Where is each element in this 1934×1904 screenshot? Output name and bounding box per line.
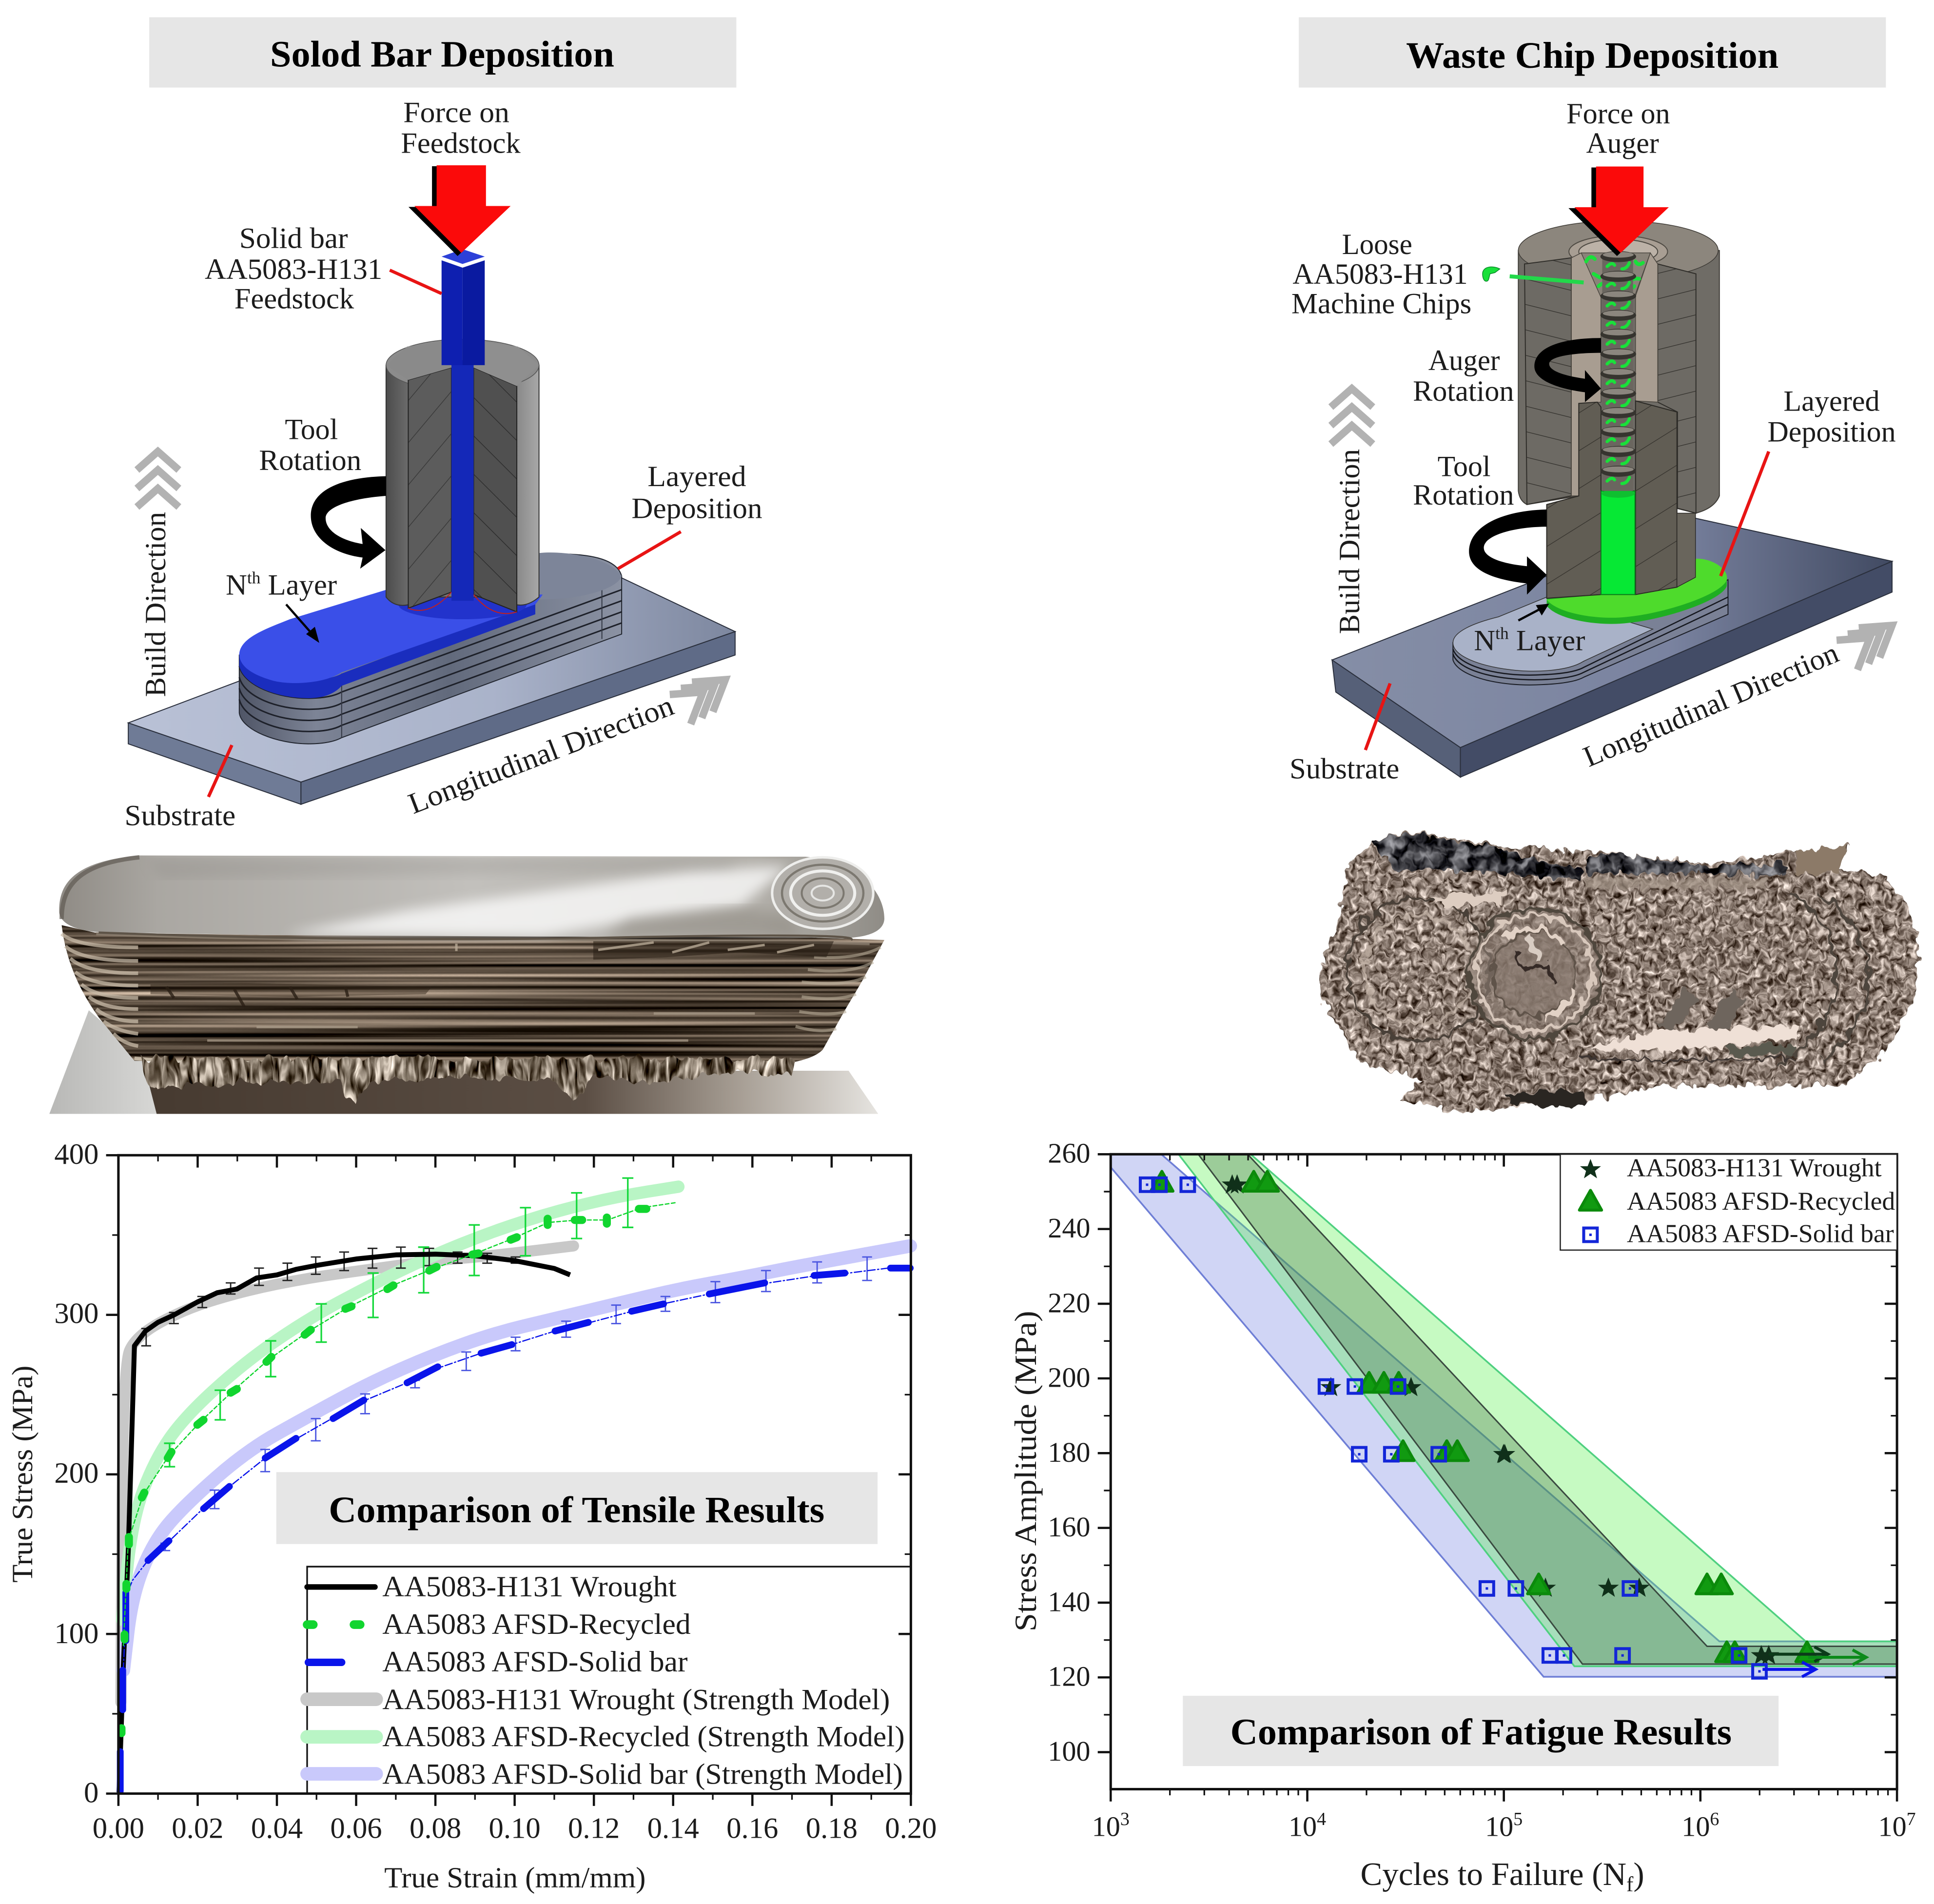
axes and ticks: [1098, 1154, 1897, 1802]
icon: red force arrow: [410, 165, 510, 255]
y axis tick labels: 160: [1048, 1511, 1090, 1543]
x axis tick labels: 7: [1907, 1809, 1916, 1829]
lower tool: [1547, 401, 1696, 598]
error bars recycled: [164, 1178, 633, 1467]
x axis tick labels: 0.08: [410, 1812, 461, 1845]
label: build direction: Build Direction: [139, 512, 172, 697]
label: loose machine chips: Machine Chips: [1291, 288, 1471, 320]
label: loose machine chips: Loose: [1342, 228, 1412, 261]
label: layered deposition: Layered: [647, 460, 746, 493]
label: substrate: [1289, 684, 1399, 785]
green deposited chips column: [1601, 489, 1635, 594]
Nth layer blue top: [239, 587, 543, 698]
heading: Comparison of Tensile Results: Comparison of Tensile Results: [329, 1490, 824, 1531]
x axis tick labels: 10: [1092, 1811, 1120, 1843]
label: layered deposition: Deposition: [631, 492, 762, 525]
panel: waste chip deposition schematic: [1289, 17, 1896, 785]
x axis tick labels: [1092, 1809, 1916, 1843]
x axis tick labels: 0.00: [93, 1812, 144, 1845]
x axis tick labels: 0.14: [647, 1812, 699, 1845]
y axis tick labels: 260: [1048, 1138, 1090, 1169]
label: auger rotation: Auger: [1428, 344, 1500, 377]
label: Nth layer: [1474, 605, 1585, 657]
arrows: run-out specimens: [1762, 1647, 1866, 1677]
panel: solid bar deposition schematic: [125, 17, 762, 832]
x axis tick labels: 10: [1878, 1811, 1907, 1843]
x axis tick labels: 0.12: [568, 1812, 620, 1845]
y axis tick labels: 300: [54, 1297, 98, 1330]
label: force on auger: [1566, 98, 1670, 160]
error bars wrought: [141, 1247, 521, 1346]
label: force on feedstock: [401, 96, 521, 160]
label: tool rotation: [1413, 451, 1514, 511]
label: longitudinal direction: Longitudinal Direction: [1579, 636, 1843, 774]
data: wrought stars: [1222, 1174, 1779, 1664]
label: build direction: [137, 451, 179, 697]
legend: AA5083-H131 Wrought: [1627, 1154, 1882, 1182]
heading: Solod Bar Deposition: Solod Bar Deposition: [270, 34, 614, 75]
label: tool rotation: Rotation: [1413, 479, 1514, 511]
solid bar scatter band: [1111, 1154, 1897, 1677]
axes and ticks: [106, 1155, 911, 1806]
heading: Waste Chip Deposition: [1299, 17, 1886, 88]
label: auger rotation: Rotation: [1413, 375, 1514, 408]
label: Nth layer: th: [1495, 624, 1509, 643]
y axis tick labels: 180: [1048, 1436, 1090, 1468]
curve: AA5083 AFSD-Solid bar: [120, 1268, 910, 1791]
curve: AA5083 AFSD-Recycled: [121, 1203, 675, 1733]
deposited layers stack: [1453, 580, 1728, 685]
label: loose machine chips: AA5083-H131: [1292, 258, 1468, 291]
wrought scatter band: [1198, 1154, 1897, 1664]
label: Nth layer: th: [247, 568, 261, 588]
label: layered deposition: Deposition: [1767, 416, 1896, 449]
x axis tick labels: 0.18: [806, 1812, 858, 1845]
x axis tick labels: 6: [1710, 1809, 1719, 1829]
label: layered deposition: Layered: [1783, 385, 1880, 417]
y axis tick labels: 220: [1048, 1287, 1090, 1318]
x axis title: True Strain (mm/mm): [384, 1862, 645, 1894]
x axis tick labels: 0.06: [330, 1812, 382, 1845]
x axis tick labels: [93, 1812, 937, 1845]
tool cylinder: [386, 339, 539, 619]
label: substrate: Substrate: [125, 800, 235, 832]
substrate plate: [128, 555, 735, 805]
curve: AA5083-H131 Wrought: [119, 1254, 570, 1792]
x axis tick labels: 10: [1681, 1811, 1710, 1843]
arrow: auger rotation: [1534, 338, 1601, 402]
label: longitudinal direction: Longitudinal Direction: [404, 689, 678, 821]
x axis title: f: [1626, 1873, 1634, 1896]
tool marks and highlights: [1347, 891, 1868, 1067]
arrow: tool rotation: [311, 476, 386, 569]
photo: solid bar deposited build: [49, 856, 884, 1114]
data: solid bar squares: [1140, 1178, 1766, 1678]
x axis tick labels: 5: [1513, 1809, 1523, 1829]
strength model bands: [121, 1187, 910, 1702]
x axis tick labels: 0.20: [885, 1812, 937, 1845]
label: layered deposition: [618, 460, 762, 569]
outer auger housing: [1518, 221, 1719, 513]
flash fringe: [136, 1059, 796, 1105]
label: substrate: [125, 745, 235, 832]
label: tool rotation: Tool: [285, 413, 338, 446]
y axis tick labels: 200: [54, 1457, 98, 1490]
y axis tick labels: [54, 1138, 98, 1809]
label: force on auger: Force on: [1566, 98, 1670, 130]
heading: Comparison of Fatigue Results: [1183, 1696, 1778, 1766]
legend: AA5083 AFSD-Recycled: [1627, 1187, 1895, 1216]
legend: [307, 1567, 911, 1794]
arrow: tool rotation: [1469, 510, 1547, 594]
label: force on feedstock: Feedstock: [401, 127, 521, 160]
x axis tick labels: 4: [1317, 1809, 1326, 1829]
legend: AA5083 AFSD-Solid bar: [1627, 1220, 1894, 1248]
label: solid bar feedstock: Solid bar: [239, 222, 348, 255]
label: solid bar feedstock: Feedstock: [234, 282, 354, 315]
label: force on auger: Auger: [1586, 127, 1659, 160]
label: substrate: Substrate: [1289, 752, 1399, 785]
error bars solid bar: [160, 1257, 872, 1551]
chart: fatigue results: [1009, 1138, 1916, 1896]
heading: Waste Chip Deposition: Waste Chip Deposition: [1406, 35, 1778, 76]
label: build direction: Build Direction: [1333, 449, 1366, 634]
x axis tick labels: 10: [1485, 1811, 1513, 1843]
legend: AA5083 AFSD-Solid bar (Strength Model): [382, 1758, 903, 1790]
icon: red force arrow: [1571, 167, 1669, 255]
label: Nth layer: Layer: [1509, 624, 1585, 657]
y axis tick labels: 240: [1048, 1212, 1090, 1244]
base plate: [49, 1010, 878, 1114]
x axis tick labels: 0.04: [251, 1812, 303, 1845]
y axis tick labels: 140: [1048, 1586, 1090, 1617]
legend: [1560, 1154, 1897, 1250]
label: tool rotation: [259, 413, 361, 477]
label: build direction: [1331, 389, 1373, 634]
y axis tick labels: 120: [1048, 1661, 1090, 1692]
label: Nth layer: [226, 568, 337, 642]
y axis title: True Stress (MPa): [6, 1366, 39, 1583]
x axis title: Cycles to Failure (N: [1361, 1856, 1626, 1892]
data: recycled triangles: [1151, 1171, 1818, 1662]
label: layered deposition: [1720, 385, 1896, 576]
machined top surface: [59, 856, 884, 940]
layered side wall: [62, 925, 884, 1066]
legend: AA5083-H131 Wrought: [382, 1570, 677, 1603]
y axis tick labels: [1048, 1138, 1090, 1767]
substrate plate: [1332, 518, 1892, 777]
label: loose machine chips: [1291, 228, 1583, 320]
heading: Comparison of Tensile Results: [276, 1472, 878, 1544]
y axis tick labels: 400: [54, 1138, 98, 1171]
heading: Solod Bar Deposition: [149, 17, 736, 88]
photo: waste chip deposited build: [1320, 831, 1918, 1113]
legend: AA5083 AFSD-Solid bar: [382, 1646, 687, 1678]
dark oxide along top edge: [1374, 833, 1848, 1105]
heading: Comparison of Fatigue Results: Comparison of Fatigue Results: [1231, 1711, 1732, 1752]
y axis tick labels: 100: [54, 1617, 98, 1650]
label: Nth layer: N: [1474, 624, 1495, 657]
solid bar feedstock: [442, 249, 485, 601]
label: Nth layer: Layer: [260, 569, 337, 601]
legend: AA5083-H131 Wrought (Strength Model): [382, 1684, 890, 1716]
recycled scatter band: [1178, 1154, 1897, 1666]
x axis title: ): [1633, 1856, 1644, 1892]
label: auger rotation: [1413, 344, 1514, 408]
x axis tick labels: 0.02: [172, 1812, 224, 1845]
legend: AA5083 AFSD-Recycled: [382, 1608, 691, 1641]
label: tool rotation: Rotation: [259, 444, 361, 477]
rough deposit body: [1320, 831, 1918, 1113]
auger screw with chips: [1586, 251, 1643, 491]
y axis tick labels: 200: [1048, 1361, 1090, 1393]
x axis tick labels: 3: [1120, 1809, 1130, 1829]
label: tool rotation: Tool: [1438, 451, 1490, 483]
x axis tick labels: 0.10: [489, 1812, 541, 1845]
y axis tick labels: 0: [84, 1776, 98, 1809]
x axis tick labels: 10: [1289, 1811, 1317, 1843]
y axis title: Stress Amplitude (MPa): [1009, 1311, 1043, 1631]
legend: AA5083 AFSD-Recycled (Strength Model): [382, 1720, 905, 1753]
chart: tensile results: [6, 1138, 937, 1894]
green top layer: [1547, 559, 1727, 624]
label: solid bar feedstock: [205, 222, 442, 315]
label: solid bar feedstock: AA5083-H131: [205, 253, 382, 286]
label: Nth layer: N: [226, 569, 247, 601]
deposited layers stack: [239, 552, 622, 744]
y axis tick labels: 100: [1048, 1735, 1090, 1767]
x axis tick labels: 0.16: [726, 1812, 778, 1845]
label: force on feedstock: Force on: [403, 96, 509, 129]
